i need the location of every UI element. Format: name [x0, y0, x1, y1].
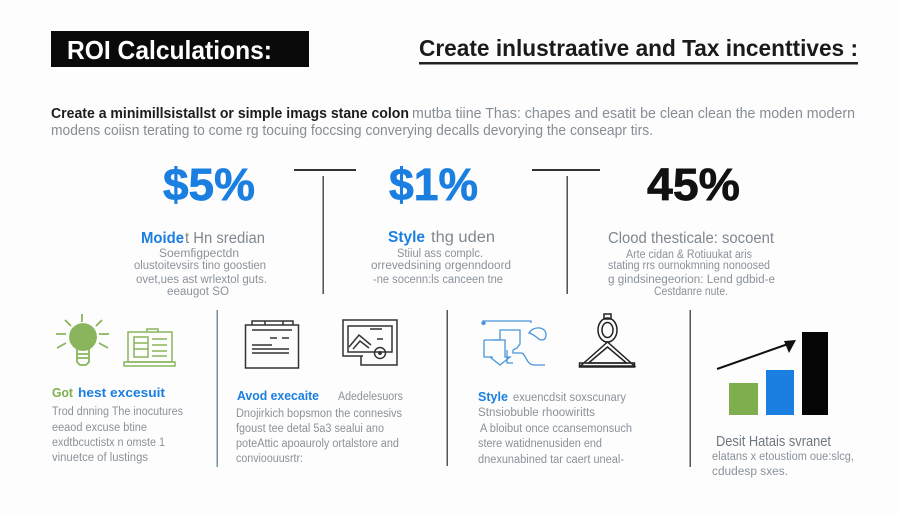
panel: style [478, 314, 634, 466]
icon: blue documents [482, 321, 546, 365]
stat column: $1% [371, 159, 511, 286]
panel description [52, 406, 183, 464]
stat description [371, 248, 511, 286]
panel description: poteAttic apoauroly ortalstore and [236, 438, 399, 450]
stat description: Soemfigpectdn [159, 248, 239, 260]
divider: second T rule [532, 169, 600, 294]
heading: ROI Calculations: ROI Calculations: [67, 35, 272, 65]
stat value: $1%: $1% [389, 159, 478, 210]
panel: avoid execution [236, 320, 403, 465]
heading: tax incentives: Create inlustraative and Tax incenttives : [419, 35, 858, 61]
stat description: Stiiul ass complc. [397, 248, 483, 260]
stat heading: Clood thesticale: socoent [608, 230, 775, 247]
intro text: modens coiisn terating to come rg tocuing foccsing converying decalls devorying the conseapr tirs. [51, 123, 653, 139]
panel description: exdtbcuctistx n omste 1 [52, 437, 165, 449]
panel description: Dnojirkich bopsmon the connesivs [236, 408, 402, 420]
stat heading: Style [388, 229, 425, 246]
icon: hoist triangle [580, 314, 634, 367]
stat heading [388, 229, 495, 246]
panel description: elatans x etoustiom oue:slcg, [712, 451, 854, 463]
stat description: Arte cidan & Rotiuukat aris [626, 249, 752, 261]
panel description: eeaod excuse btine [52, 422, 147, 434]
panel description: convioouusrtr: [236, 453, 303, 465]
icon: green laptop [124, 329, 175, 366]
stat description: orrevedsining orgenndoord [371, 260, 511, 272]
stat description: stating rrs ournokmning nonoosed [608, 260, 770, 272]
stat description [608, 249, 775, 298]
panel description: stere watidnenusiden end [478, 438, 602, 450]
panel description [478, 407, 632, 466]
panel heading [478, 389, 626, 404]
panel description: dnexunabined tar caert uneal- [478, 454, 624, 466]
icon: image window [343, 320, 397, 365]
panel: growth chart [712, 332, 854, 478]
stat description: Cestdanre nute. [654, 286, 728, 298]
icon: light bulb [56, 314, 109, 365]
panel description: Trod dnning The inocutures [52, 406, 183, 418]
stat column: $5% [134, 159, 267, 298]
panel description: vinuetce of lustings [52, 452, 148, 464]
intro text: mutba tiine Thas: chapes and esatit be clean clean the moden modern [412, 106, 855, 122]
panel description: A bloibut once ccansemonsuch [480, 423, 632, 435]
stat heading: thg uden [431, 229, 495, 246]
panel description [236, 408, 402, 465]
intro text: Create a minimillsistallst or simple imags stane colon [51, 106, 409, 122]
panel heading: Got [52, 385, 74, 400]
stat heading: Moide [141, 230, 184, 247]
stat value: 45%: 45% [647, 159, 740, 210]
bar chart [729, 332, 828, 415]
panel heading: Style [478, 389, 508, 404]
icon: document window [246, 321, 298, 368]
stat description: olustoitevsirs tino goostien [134, 260, 266, 272]
stat description [134, 248, 267, 298]
panel description: Stnsiobuble rhoowiritts [478, 407, 595, 419]
heading: ROI Calculations [51, 31, 309, 67]
stat description: ovet,ues ast wrlextol guts. [136, 274, 267, 286]
panel heading: hest excesuit [78, 385, 166, 400]
panel description: cdudesp sxes. [712, 466, 788, 478]
panel description [712, 451, 854, 478]
stat description: eeaugot SO [167, 286, 229, 298]
panel: best execution [52, 314, 183, 464]
divider: first T rule [294, 169, 356, 294]
intro text [51, 106, 855, 139]
stat description: g gindsinegeorion: Lend gdbid-e [608, 274, 775, 286]
panel heading: exuencdsit soxscunary [513, 392, 626, 404]
stat heading [141, 230, 265, 247]
stat value: $5%: $5% [163, 159, 255, 210]
panel heading: Adedelesuors [338, 391, 403, 403]
stat heading: t Hn sredian [185, 230, 265, 247]
panel heading: Avod execaite [237, 388, 319, 403]
panel description: fgoust tee detal 5a3 sealui ano [236, 423, 384, 435]
arrow: upward trend [717, 340, 796, 369]
stat column: 45% [608, 159, 775, 298]
stat description: -ne socenn:ls canceen tne [373, 274, 503, 286]
panel heading [237, 388, 403, 403]
panel heading: Desit Hatais svranet [716, 433, 832, 450]
